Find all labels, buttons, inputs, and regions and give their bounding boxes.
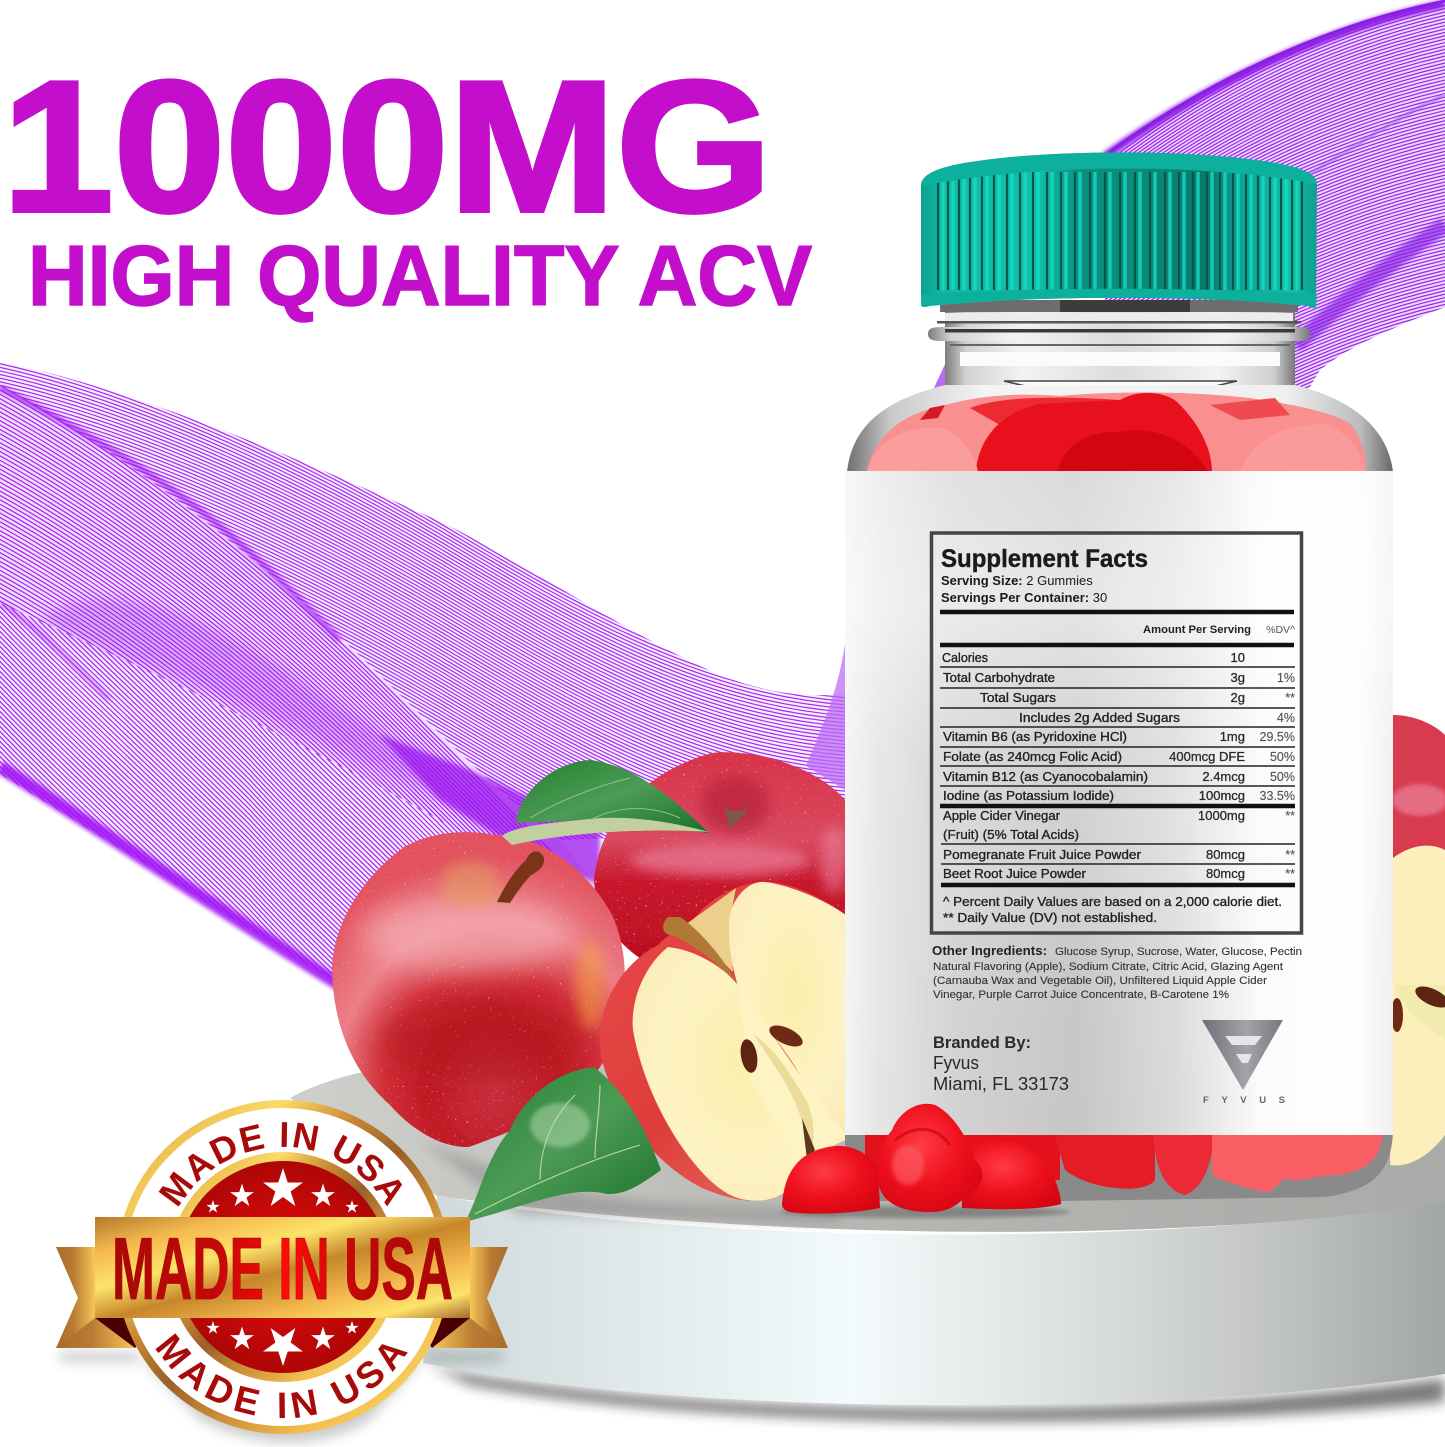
nutrient rows: 100mcg — [1199, 788, 1245, 803]
bottom leaf — [465, 1067, 661, 1222]
back apple — [594, 752, 848, 970]
other ingredients: Natural Flavoring (Apple), Sodium Citrate, Citric Acid, Glazing Agent — [933, 961, 1284, 973]
nutrient rows: 400mcg DFE — [1169, 749, 1245, 764]
glass neck — [928, 300, 1310, 392]
nutrient rows: Includes 2g Added Sugars — [1019, 710, 1181, 725]
serving size: Serving Size: 2 Gummies — [941, 573, 1093, 588]
bottle label — [845, 471, 1393, 1135]
nutrient rows: 2.4mcg — [1202, 769, 1245, 784]
nutrient rows: Vitamin B12 (as Cyanocobalamin) — [943, 769, 1148, 784]
outer gold ring — [116, 1100, 450, 1434]
nutrient rows: ** — [1285, 691, 1295, 705]
podium top surface — [290, 1050, 1445, 1232]
inner skin wedge — [685, 888, 736, 972]
banner text: MADE IN USA — [112, 1219, 453, 1318]
nutrient rows: 1mg — [1220, 729, 1245, 744]
flesh upper lobe — [729, 882, 846, 1135]
nutrient rows: (Fruit) (5% Total Acids) — [943, 827, 1079, 842]
nutrient rows: 29.5% — [1260, 730, 1295, 744]
other ingredients: Vinegar, Purple Carrot Juice Concentrate, B-Carotene 1% — [933, 989, 1229, 1001]
ribbon tails — [56, 1247, 508, 1348]
icon: fyvus logo — [1202, 1020, 1285, 1106]
servings per container: Servings Per Container: 30 — [941, 590, 1107, 605]
other ingredients: Glucose Syrup, Sucrose, Water, Glucose, Pectin — [1055, 946, 1302, 958]
jar bottom — [845, 1130, 1393, 1201]
podium side — [423, 1195, 1445, 1405]
nutrient rows — [942, 650, 1295, 881]
arc path lower — [132, 1267, 434, 1418]
cut apple half — [600, 882, 846, 1201]
badge shadow — [60, 1352, 506, 1442]
nutrient rows: 1000mg — [1198, 808, 1245, 823]
right-hand apple slices — [1390, 715, 1445, 1165]
glass shoulder — [847, 385, 1393, 472]
nutrient rows: Vitamin B6 (as Pyridoxine HCl) — [943, 729, 1127, 744]
podium contact shadow — [420, 1140, 840, 1222]
apple seeds — [766, 1021, 806, 1051]
ribbon: upper band — [0, 362, 845, 840]
supplement bottle — [845, 152, 1393, 1201]
nutrient rows: 80mcg — [1206, 866, 1245, 881]
other ingredients: Other Ingredients: — [932, 943, 1047, 958]
footnotes: ^ Percent Daily Values are based on a 2,000 calorie diet. — [943, 894, 1282, 909]
made in usa badge — [56, 1100, 508, 1447]
apple stem — [663, 917, 738, 985]
nutrient rows: 2g — [1231, 690, 1245, 705]
bottle cap — [921, 152, 1317, 308]
gummy: right — [960, 1140, 1061, 1209]
nutrient rows: 50% — [1270, 750, 1295, 764]
arc paths for ring text — [163, 1147, 403, 1267]
nutrient rows: Total Carbohydrate — [943, 670, 1055, 685]
ring text: top: MADE IN USA — [158, 1122, 402, 1206]
nutrient rows: 50% — [1270, 770, 1295, 784]
column headers: %DV^ — [1266, 624, 1295, 636]
subheadline: high quality acv: HIGH QUALITY ACV — [28, 229, 812, 324]
nutrient rows: Iodine (as Potassium Iodide) — [943, 788, 1114, 803]
row rules — [940, 667, 1295, 864]
top-right purple wave ribbon — [933, 0, 1445, 622]
ribbon: lower band — [0, 603, 595, 980]
gummy: heart — [877, 1104, 982, 1212]
nutrient rows: 3g — [1231, 670, 1245, 685]
inner gold ring — [168, 1152, 398, 1382]
branded by: Fyvus — [933, 1053, 979, 1073]
nutrient rows: ** — [1285, 867, 1295, 881]
panel rules — [940, 612, 1295, 885]
nutrient rows: ** — [1285, 809, 1295, 823]
flesh seam patch — [737, 983, 846, 1165]
branded by — [933, 1033, 1069, 1094]
ribbon banner — [95, 1217, 470, 1318]
stars — [206, 1168, 359, 1366]
left purple wave ribbons — [0, 362, 845, 992]
nutrient rows: Beet Root Juice Powder — [943, 866, 1087, 881]
nutrient rows: Folate (as 240mcg Folic Acid) — [943, 749, 1122, 764]
platform podium — [290, 1050, 1445, 1421]
gummies in shoulder — [867, 392, 1367, 472]
white ring — [124, 1108, 442, 1426]
nutrient rows: Total Sugars — [980, 690, 1057, 705]
nutrient rows: 4% — [1277, 711, 1295, 725]
nutrient rows: 80mcg — [1206, 847, 1245, 862]
nutrient rows: 33.5% — [1260, 789, 1295, 803]
other ingredients: (Carnauba Wax and Vegetable Oil), Unfiltered Liquid Apple Cider — [933, 975, 1267, 987]
nutrient rows: 10 — [1231, 650, 1245, 665]
icon: fyvus logo: FYVUS — [1203, 1095, 1285, 1106]
branded by: Miami, FL 33173 — [933, 1074, 1069, 1094]
ribbon dense creases — [0, 388, 340, 640]
footnotes — [943, 894, 1282, 925]
nutrient rows: Pomegranate Fruit Juice Powder — [943, 847, 1142, 862]
ring text: bottom: MADE IN USA — [156, 1333, 408, 1418]
gummy: left — [782, 1146, 880, 1214]
other ingredients — [932, 943, 1302, 1001]
headline: 1000MG: 1000MG — [2, 42, 772, 251]
nutrient rows: Apple Cider Vinegar — [943, 808, 1061, 823]
column headers: Amount Per Serving — [1143, 624, 1251, 636]
footnotes: ** Daily Value (DV) not established. — [943, 910, 1157, 925]
column headers — [1143, 624, 1295, 636]
label sheen — [845, 471, 1393, 1135]
red disc — [177, 1161, 389, 1373]
whole apple — [332, 760, 709, 1147]
flesh lower half — [633, 947, 846, 1201]
branded by: Branded By: — [933, 1033, 1031, 1052]
front gummies — [780, 1104, 1070, 1218]
top leaf — [502, 760, 709, 845]
ribbon dense patch — [40, 599, 520, 830]
nutrient rows: Calories — [942, 650, 988, 665]
ribbon: middle band — [0, 385, 595, 888]
supplement facts panel — [932, 533, 1302, 933]
nutrient rows: 1% — [1277, 671, 1295, 685]
panel heading: Supplement Facts — [941, 545, 1148, 573]
nutrient rows: ** — [1285, 848, 1295, 862]
podium shadow — [430, 1367, 1445, 1421]
